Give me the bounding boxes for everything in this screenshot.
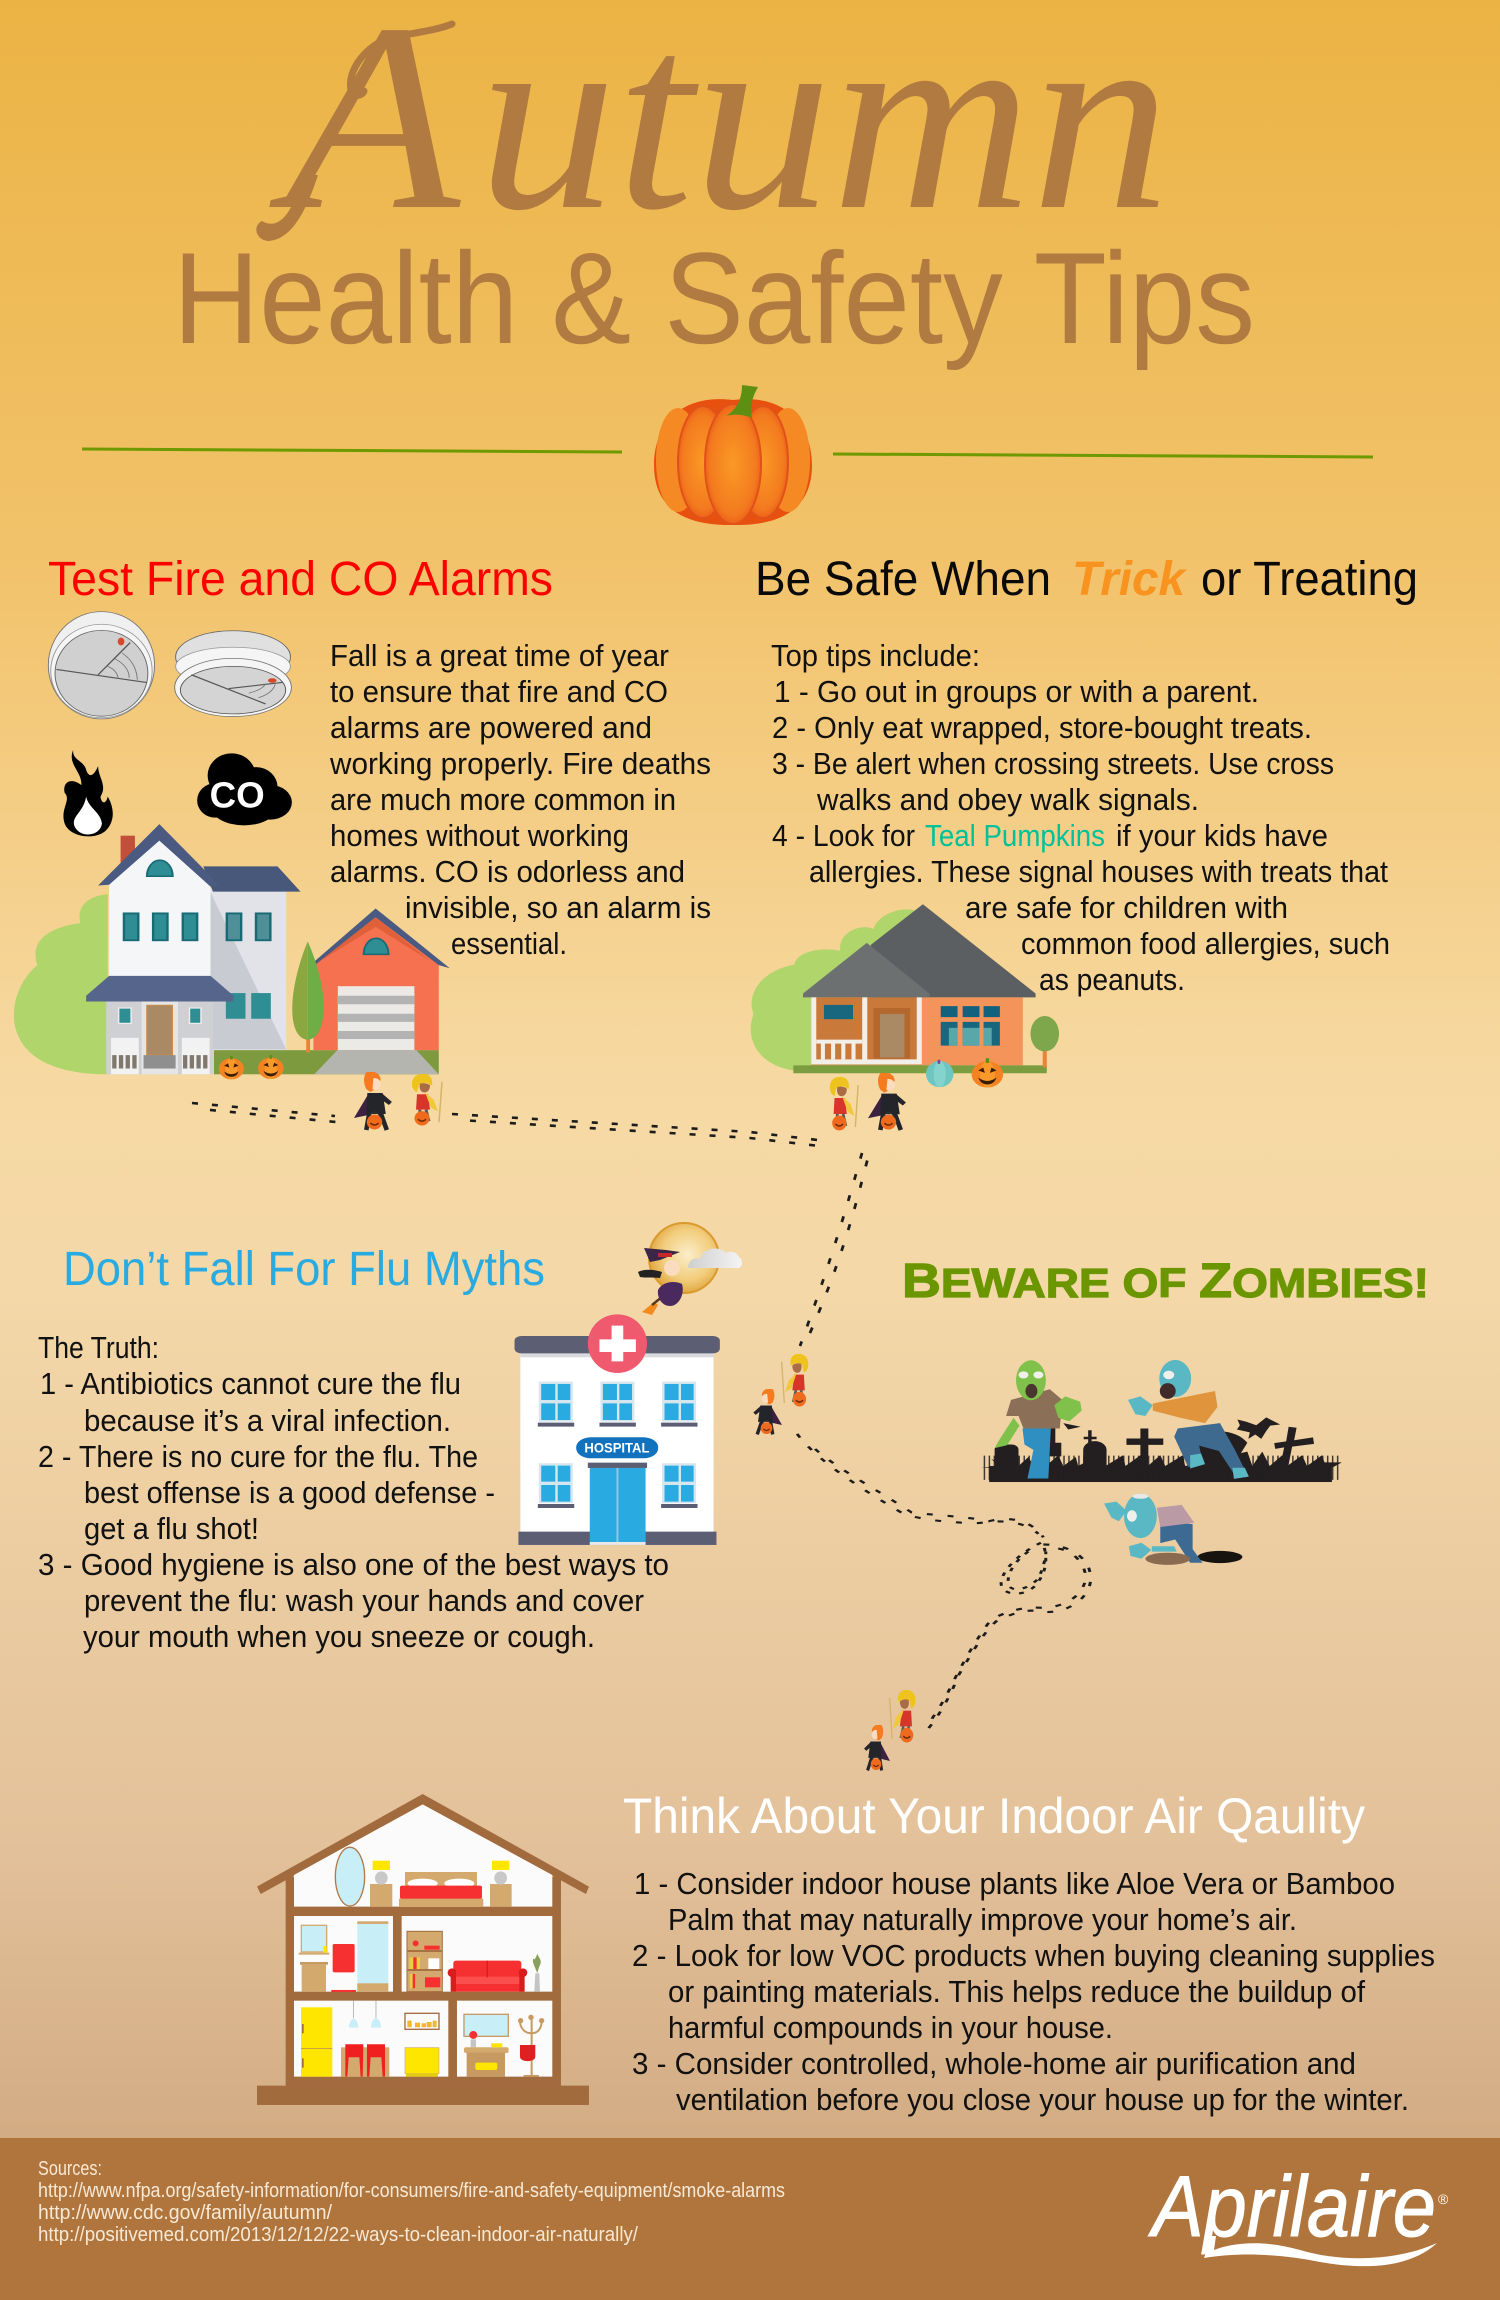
kitchen furniture [301,2001,439,2077]
trick-or-treaters 1: girl [412,1074,442,1126]
icon: jack-o-lantern [972,1058,1003,1087]
text block: fire and CO alarms [329,638,711,961]
text block: indoor air tips: 3 - Consider controlled, whole-home air purification and [632,2046,1356,2081]
text block: flu truths: prevent the flu: wash your hands and cover [84,1583,644,1618]
trick-or-treaters 3: girl [782,1354,808,1407]
icon: pumpkin [654,385,812,525]
bedroom furniture [335,1847,512,1907]
heading: Be Safe When Trick or Treating: or Treating [1201,553,1418,606]
footer band [0,2138,1500,2300]
text block: indoor air tips [632,1866,1435,2117]
text block: flu truths [38,1330,669,1654]
sources: http://www.cdc.gov/family/autumn/ [38,2202,332,2224]
text block: flu truths: The Truth: [38,1330,159,1365]
text block: indoor air tips: harmful compounds in your house. [668,2010,1113,2045]
icon: teal pumpkin [926,1060,953,1087]
heading: Be Safe When Trick or Treating [755,553,1418,606]
heading: Be Safe When Trick or Treating: Be Safe When [755,553,1051,606]
text block: fire and CO alarms: homes without working [330,818,629,853]
illustration: house with garage [14,824,450,1074]
hospital sign: HOSPITAL [584,1440,649,1456]
footprints and zombies [797,1360,1342,1736]
text block: fire and CO alarms: are much more common in [330,782,676,817]
red cross badge [588,1314,647,1373]
icon: smoke alarm left [48,612,155,719]
trick-or-treaters 3: vampire [753,1389,782,1434]
text block: indoor air tips: 2 - Look for low VOC products when buying cleaning supplies [632,1938,1435,1973]
illustration: orange house [751,904,1059,1087]
bathroom furniture [299,1921,388,1992]
text block: trick or treating tips: common food allergies, such [1021,926,1390,961]
text block: trick or treating tips: Top tips include: [771,638,980,673]
logo: Aprilaire: Aprilaire [1147,2159,1436,2255]
text block: fire and CO alarms: alarms are powered and [330,710,652,745]
text block: fire and CO alarms: invisible, so an alarm is [405,890,711,925]
icon: flame [63,750,113,836]
divider line right [833,454,1373,457]
text block: indoor air tips: 1 - Consider indoor house plants like Aloe Vera or Bamboo [634,1866,1395,1901]
text block: trick or treating tips: allergies. These signal houses with treats that [809,854,1388,889]
hospital sign [576,1437,658,1458]
illustration: house cross-section [257,1794,589,2105]
text block: flu truths: 1 - Antibiotics cannot cure the flu [40,1366,461,1401]
trick-or-treaters 2: girl [830,1077,858,1130]
zombie: crouching [1104,1494,1242,1565]
text block: fire and CO alarms: to ensure that fire and CO [330,674,668,709]
text block: fire and CO alarms: working properly. Fire deaths [329,746,711,781]
heading: Think About Your Indoor Air Qaulity: Think About Your Indoor Air Qaulity [623,1788,1365,1844]
icon: CO cloud: CO [210,775,265,815]
divider line left [82,449,622,452]
text block: indoor air tips: Palm that may naturally improve your home’s air. [668,1902,1297,1937]
zombie: blue with orange shirt [1128,1360,1249,1479]
trick-or-treaters 4: girl [890,1690,915,1743]
text block: flu truths: your mouth when you sneeze or cough. [83,1619,595,1654]
icon: CO cloud [197,753,292,825]
logo: Aprilaire: ® [1438,2191,1449,2207]
sources: Sources: [38,2158,102,2180]
illustration: graveyard silhouette [981,1417,1342,1482]
zombie: green [995,1360,1082,1478]
trick-or-treaters 1: vampire [354,1071,392,1130]
heading: Be Safe When Trick or Treating: Trick [1072,553,1187,606]
hospital door [588,1463,647,1545]
text block: fire and CO alarms: Fall is a great time of year [330,638,669,673]
footprints: path 1 left [192,1103,336,1122]
text block: trick or treating tips: 4 - Look for [772,818,915,853]
sources: http://positivemed.com/2013/12/12/22-ways-to-clean-indoor-air-naturally/ [38,2224,638,2246]
trick-or-treaters 2: vampire [868,1072,906,1130]
text block: indoor air tips: ventilation before you close your house up for the winter. [676,2082,1409,2117]
text block: trick or treating tips: as peanuts. [1039,962,1185,997]
text block: trick or treating tips: 3 - Be alert when crossing streets. Use cross [772,746,1334,781]
text block: flu truths: get a flu shot! [84,1511,259,1546]
text block: flu truths: 2 - There is no cure for the flu. The [38,1439,478,1474]
illustrations: alarms and house 1 [14,612,450,1079]
text block: flu truths: because it’s a viral infection. [84,1403,451,1438]
text block: trick or treating tips: Teal Pumpkins [925,818,1105,853]
illustration: moon, cloud and witch [638,1223,742,1315]
subtitle: Health & Safety Tips [173,225,1255,371]
text block: fire and CO alarms: essential. [451,926,567,961]
text block: flu truths: 3 - Good hygiene is also one of the best ways to [38,1547,669,1582]
trick-or-treaters 4: vampire [864,1725,890,1770]
illustration: hospital [515,1314,720,1545]
footprints: path 2 down [800,1150,870,1346]
text block: trick or treating tips: 1 - Go out in groups or with a parent. [774,674,1259,709]
text block: flu truths: best offense is a good defense - [84,1475,495,1510]
hospital windows [538,1382,698,1508]
heading: Test Fire and CO Alarms: Test Fire and CO Alarms [48,553,553,606]
sources [38,2158,785,2246]
heading: Don't Fall For Flu Myths: Don’t Fall For Flu Myths [63,1243,545,1296]
sources: http://www.nfpa.org/safety-information/for-consumers/fire-and-safety-equipment/smoke-alarms [38,2180,785,2202]
hall furniture [464,2014,544,2077]
icon: jack-o-lantern 2 [258,1055,284,1079]
text block: trick or treating tips: if your kids have [1116,818,1328,853]
footprints: path 1 right [452,1114,828,1147]
icon: smoke alarm right [175,631,291,717]
footprints: zombie detour path [797,1434,1091,1736]
text block: trick or treating tips: 2 - Only eat wrapped, store-bought treats. [772,710,1312,745]
text block: trick or treating tips: walks and obey walk signals. [816,782,1199,817]
text block: indoor air tips: or painting materials. This helps reduce the buildup of [668,1974,1365,2009]
text block: trick or treating tips: are safe for children with [965,890,1288,925]
heading: Beware of Zombies: BEWARE OF ZOMBIES! [902,1255,1429,1308]
living room furniture [407,1931,541,1992]
text block: trick or treating tips [771,638,1390,997]
icon: jack-o-lantern [219,1056,244,1079]
text block: fire and CO alarms: alarms. CO is odorless and [330,854,685,889]
